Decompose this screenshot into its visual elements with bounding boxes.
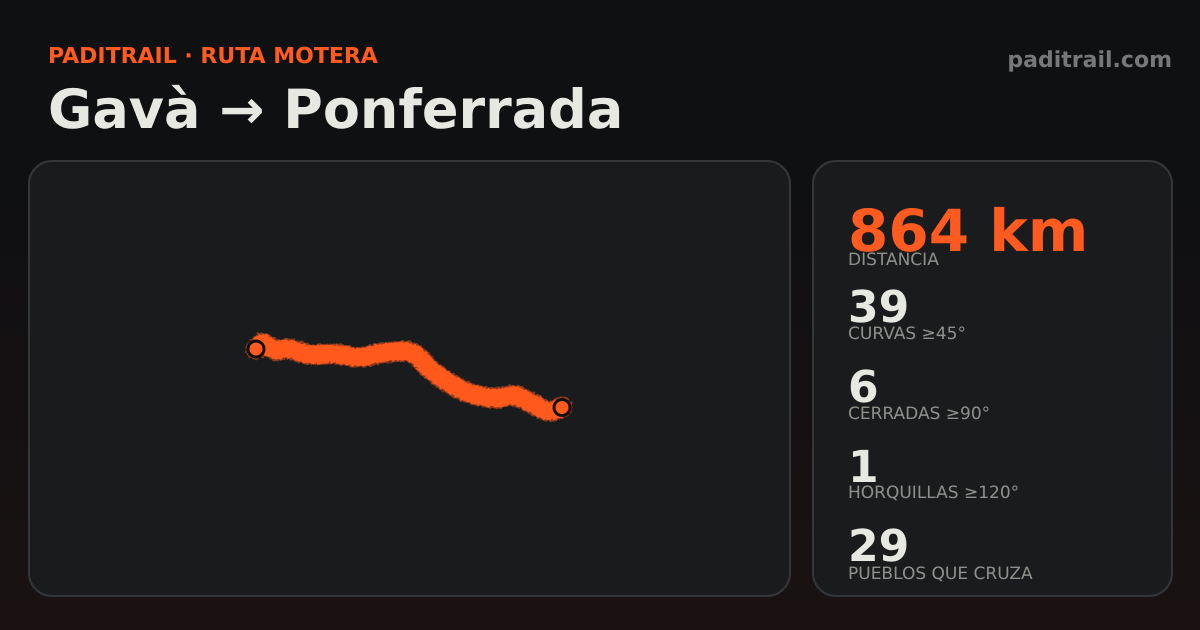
stat: towns value: 29 [848, 521, 909, 572]
stat: curves value: 39 [848, 282, 909, 333]
stat: distance value: 864 km [848, 197, 1088, 265]
stat: tight curves label: CERRADAS ≥90° [848, 404, 990, 424]
route line [256, 343, 562, 411]
panel: route map [28, 160, 791, 597]
end marker [554, 400, 570, 416]
stat: towns label: PUEBLOS QUE CRUZA [848, 564, 1033, 584]
title: Gavà → Ponferrada [48, 78, 623, 141]
stat: distance label: DISTANCIA [848, 250, 939, 270]
panel: stats [812, 160, 1173, 597]
stat: hairpins value: 1 [848, 442, 879, 493]
stat: tight curves value: 6 [848, 362, 879, 413]
stat: hairpins label: HORQUILLAS ≥120° [848, 483, 1019, 503]
stat: curves label: CURVAS ≥45° [848, 324, 966, 344]
site url: paditrail.com [1007, 48, 1172, 73]
eyebrow heading: PADITRAIL · RUTA MOTERA [48, 44, 378, 69]
start marker [248, 341, 264, 357]
